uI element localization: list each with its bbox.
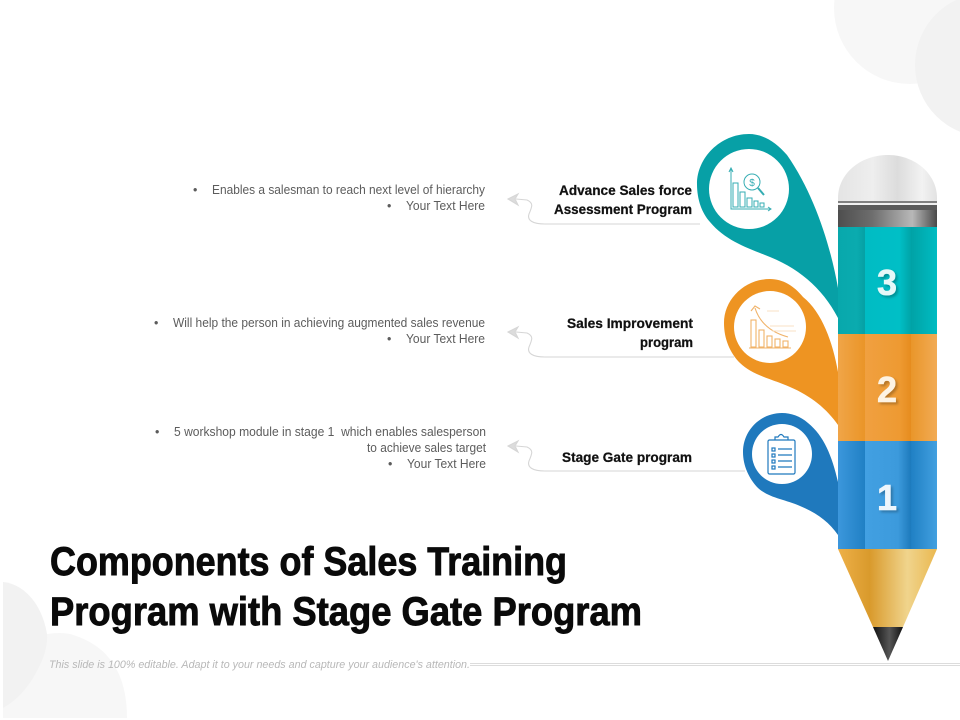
icon circle 2 — [734, 291, 806, 363]
icon circle 1 — [752, 424, 812, 484]
description: stage 1: to achieve sales target — [367, 441, 486, 455]
background circles: top right — [834, 0, 960, 137]
label: Advance Sales force Assessment Program: Assessment Program — [554, 201, 692, 217]
description: stage 2: Will help the person in achieving augmented sales revenue — [173, 316, 485, 330]
description: stage 2: • — [154, 316, 158, 330]
description: stage 3: Enables a salesman to reach next level of hierarchy — [212, 183, 486, 197]
description: stage 2 — [154, 316, 485, 346]
label: Sales Improvement program: program — [640, 334, 693, 350]
pencil eraser — [838, 155, 937, 201]
subtitle: This slide is 100% editable. Adapt it to your needs and capture your audience's attention. — [49, 659, 470, 671]
description: stage 3 — [193, 183, 486, 213]
title: Program with Stage Gate Program — [50, 590, 642, 634]
label: Sales Improvement program — [567, 315, 693, 350]
number 1: 1 — [877, 477, 897, 518]
label: Stage Gate program: Stage Gate program — [562, 449, 692, 465]
title — [50, 540, 642, 634]
pencil segment 3 teal — [838, 227, 937, 334]
icon circle 3 — [709, 149, 789, 229]
icon: declining bar chart — [749, 306, 796, 348]
description: stage 3: • — [387, 199, 391, 213]
description: stage 1: • — [388, 457, 392, 471]
teardrop 1 blue — [743, 413, 838, 535]
description: stage 3: Your Text Here — [406, 199, 485, 213]
label: Sales Improvement program: Sales Improvement — [567, 315, 693, 331]
teardrop 2 orange — [724, 279, 838, 425]
description: stage 1: Your Text Here — [407, 457, 486, 471]
description: stage 1: 5 workshop module in stage 1 which enables salesperson — [174, 425, 486, 439]
description: stage 1: • — [155, 425, 159, 439]
number 3: 3 — [877, 262, 897, 303]
pencil wood tip — [838, 549, 937, 627]
pencil segment 2 orange — [838, 334, 937, 441]
description: stage 2: Your Text Here — [406, 332, 485, 346]
pencil — [838, 155, 937, 661]
pencil metal band — [838, 201, 937, 227]
description: stage 1 — [155, 425, 486, 471]
number 2: 2 — [877, 369, 897, 410]
pencil lead — [873, 627, 903, 661]
pencil segment 1 blue — [838, 441, 937, 549]
background circles: bottom left — [3, 582, 127, 718]
icon: bar chart with magnifier — [729, 168, 771, 211]
connector arrow 3 — [508, 194, 700, 224]
connector arrow 2 — [508, 327, 734, 357]
connector arrow 1 — [508, 441, 745, 471]
description: stage 3: • — [193, 183, 197, 197]
teardrop 3 teal — [697, 134, 838, 318]
label: Advance Sales force Assessment Program: Advance Sales force — [559, 182, 692, 198]
icon: clipboard checklist — [768, 434, 795, 474]
title: Components of Sales Training — [50, 540, 567, 584]
icon: bar chart with magnifier: $ — [749, 178, 755, 189]
description: stage 2: • — [387, 332, 391, 346]
label: Advance Sales force Assessment Program — [554, 182, 692, 217]
